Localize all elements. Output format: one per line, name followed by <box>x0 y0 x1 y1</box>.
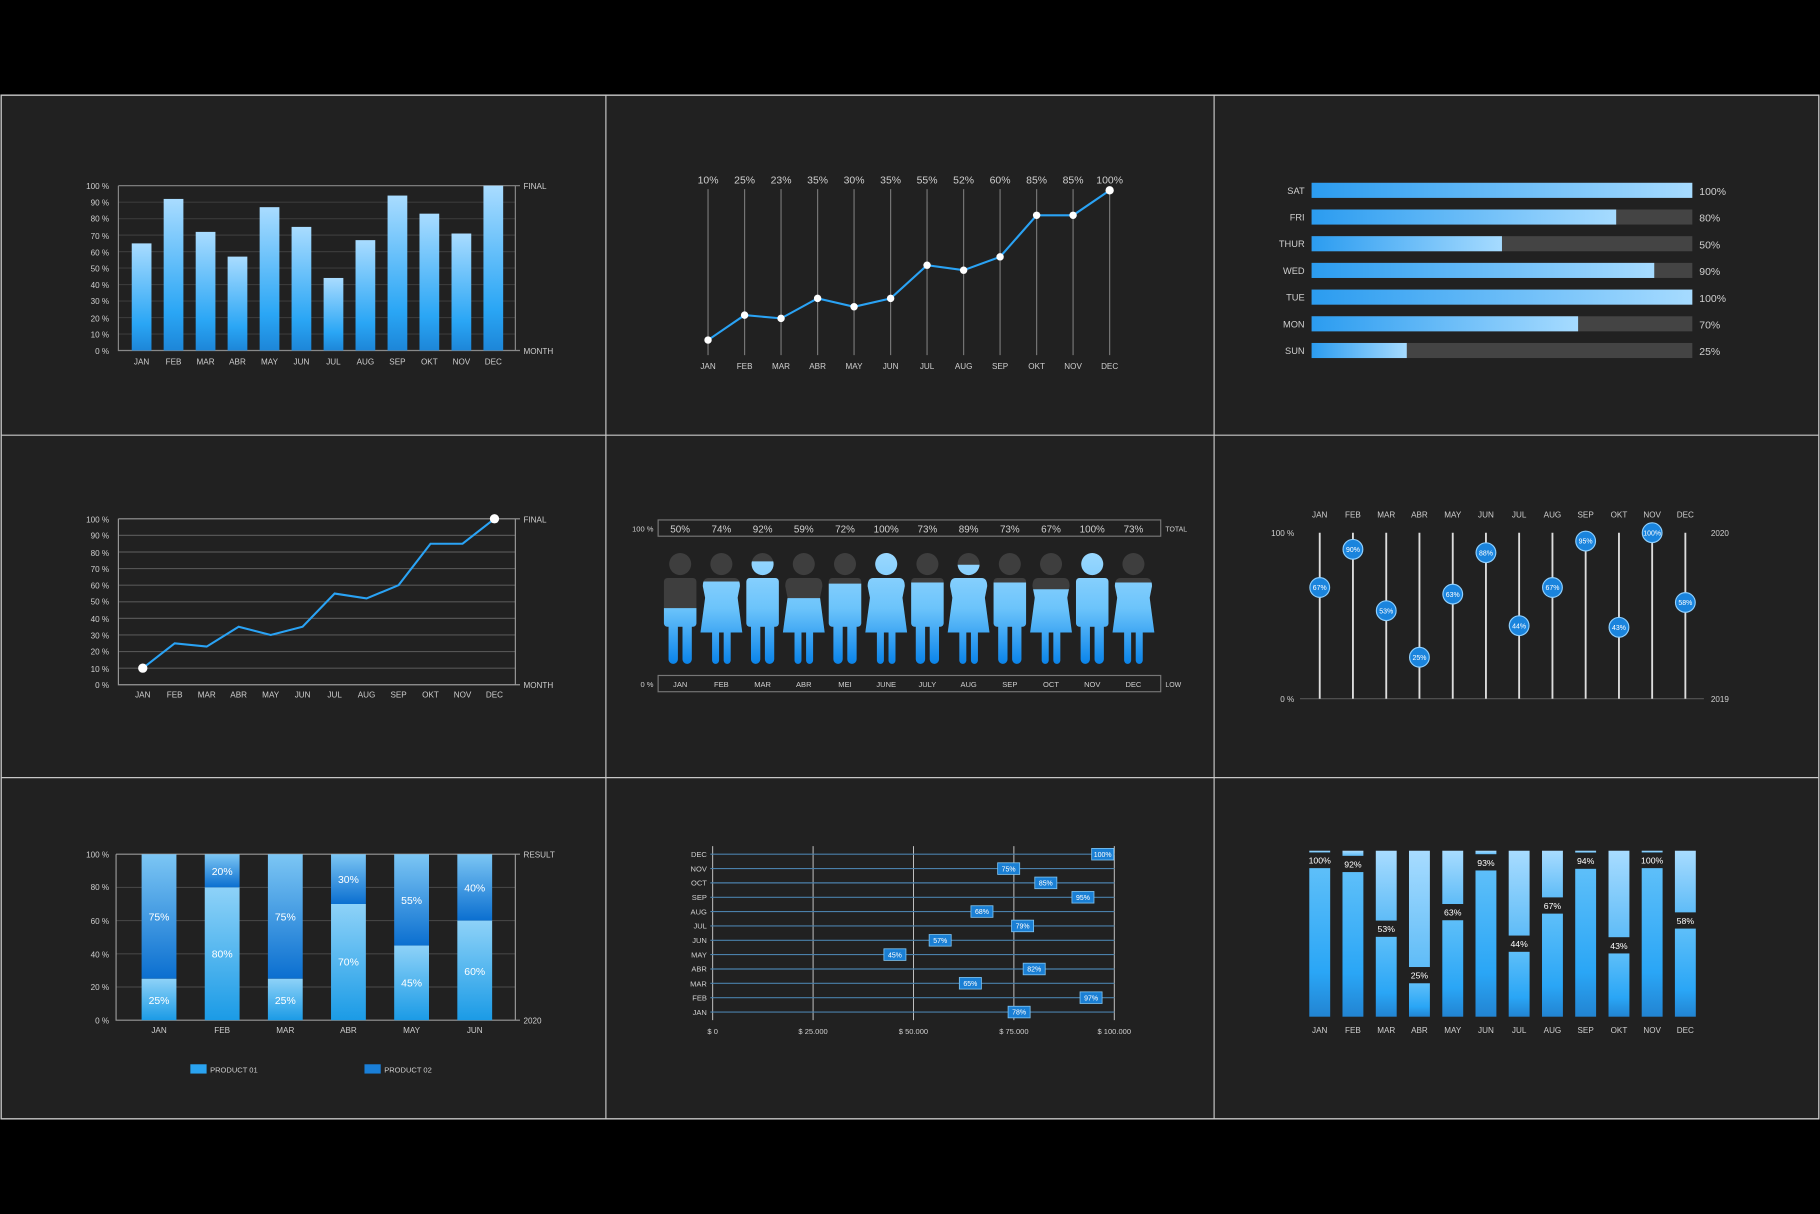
panel: grid line chart: JAN <box>135 691 151 700</box>
panel: grid line chart: AUG <box>358 691 375 700</box>
panel: grid line chart: 80 % <box>91 549 109 558</box>
panel: line chart with vertical guides: JAN <box>700 362 716 371</box>
panel: lollipop sliders: JUN <box>1478 511 1494 520</box>
panel: people pictogram: 0 % <box>640 680 654 689</box>
panel: lollipop sliders: 2019 <box>1711 695 1729 704</box>
panel: people pictogram: OCT <box>1043 680 1059 689</box>
panel: monthly bar chart <box>86 182 553 366</box>
panel: horizontal weekday bars: FRI <box>1290 213 1305 223</box>
panel: revenue dot tags: 57% <box>933 938 947 945</box>
panel: people pictogram: TOTAL <box>1165 527 1187 534</box>
panel: grid line chart: 30 % <box>91 631 109 640</box>
panel: lollipop sliders: MAR <box>1377 511 1395 520</box>
panel: lollipop sliders: FEB <box>1345 511 1361 520</box>
panel: line chart with vertical guides: 52% <box>953 175 974 186</box>
panel: line chart with vertical guides: 25% <box>734 175 755 186</box>
panel: stacked product bars: 25% <box>149 996 169 1007</box>
figures filled <box>664 553 1154 664</box>
panel: grid line chart: 10 % <box>91 665 109 674</box>
panel: column progress bars: DEC <box>1677 1026 1694 1035</box>
panel: monthly bar chart: JAN <box>134 357 149 366</box>
panel: revenue dot tags: 45% <box>888 952 902 959</box>
panel: stacked product bars: JAN <box>151 1026 167 1035</box>
panel: line chart with vertical guides: AUG <box>955 362 972 371</box>
panel: line chart with vertical guides: 100% <box>1096 175 1123 186</box>
panel: line chart with vertical guides: 85% <box>1063 175 1084 186</box>
panel: horizontal weekday bars: WED <box>1283 266 1305 276</box>
panel: lollipop sliders: 44% <box>1512 623 1526 630</box>
panel: line chart with vertical guides: JUL <box>920 362 935 371</box>
panel: grid line chart: SEP <box>390 691 407 700</box>
panel: lollipop sliders: 67% <box>1313 585 1327 592</box>
panel: stacked product bars: 0 % <box>95 1017 109 1026</box>
panel: monthly bar chart: 90 % <box>91 198 109 207</box>
legend: PRODUCT 01 <box>210 1065 258 1074</box>
panel: column progress bars: JAN <box>1312 1026 1328 1035</box>
panel: stacked product bars: 60 % <box>91 917 109 926</box>
panel: line chart with vertical guides: MAR <box>772 362 790 371</box>
panel: column progress bars: 67% <box>1544 901 1561 911</box>
panel: horizontal weekday bars <box>1279 183 1726 358</box>
panel: people pictogram: 74% <box>712 525 731 536</box>
panel: revenue dot tags: $ 100.000 <box>1098 1027 1131 1036</box>
panel: people pictogram: 89% <box>959 525 979 536</box>
panel: lollipop sliders: 100 % <box>1271 529 1294 538</box>
panel: people pictogram: 73% <box>1000 525 1020 536</box>
panel: revenue dot tags: $ 25.000 <box>798 1027 828 1036</box>
panel: revenue dot tags <box>690 846 1131 1036</box>
panel: grid line chart: 40 % <box>91 615 109 624</box>
panel: grid line chart: 60 % <box>91 581 109 590</box>
panel: grid line chart: JUL <box>327 691 342 700</box>
panel: people pictogram: LOW <box>1165 682 1182 689</box>
panel: stacked product bars: 60% <box>464 967 485 978</box>
panel: column progress bars: NOV <box>1643 1026 1662 1035</box>
panel: horizontal weekday bars: 80% <box>1699 214 1720 225</box>
legend <box>190 1064 432 1074</box>
panel: monthly bar chart: 0 % <box>95 347 109 356</box>
panel: line chart with vertical guides: NOV <box>1064 362 1082 371</box>
panel: column progress bars: 94% <box>1577 856 1595 866</box>
panel: column progress bars: OKT <box>1611 1026 1627 1035</box>
panel: grid line chart: 90 % <box>91 532 109 541</box>
panel: line chart with vertical guides: 23% <box>771 175 791 186</box>
panel: lollipop sliders: JUL <box>1512 511 1527 520</box>
panel: line chart with vertical guides: ABR <box>809 362 826 371</box>
panel: column progress bars: 53% <box>1378 924 1395 934</box>
panel: column progress bars: 63% <box>1444 908 1462 918</box>
panel: line chart with vertical guides <box>698 175 1123 371</box>
panel: lollipop sliders: NOV <box>1643 511 1662 520</box>
panel: lollipop sliders: AUG <box>1544 511 1561 520</box>
panel: monthly bar chart: 70 % <box>91 232 109 241</box>
panel: lollipop sliders: 67% <box>1545 585 1559 592</box>
panel: monthly bar chart: JUN <box>294 357 309 366</box>
panel: grid line chart: FEB <box>167 691 183 700</box>
panel: lollipop sliders: OKT <box>1611 511 1627 520</box>
panel: grid line chart: OKT <box>422 691 439 700</box>
panel: lollipop sliders: 0 % <box>1280 695 1294 704</box>
panel: lollipop sliders: 88% <box>1479 550 1493 557</box>
panel: column progress bars: 25% <box>1411 971 1428 981</box>
panel: stacked product bars: MAY <box>403 1026 421 1035</box>
panel: revenue dot tags: DEC <box>691 850 707 859</box>
panel: stacked product bars: 45% <box>401 979 422 990</box>
panel: line chart with vertical guides: MAY <box>846 362 863 371</box>
panel: horizontal weekday bars: 100% <box>1699 187 1726 198</box>
panel: grid line chart <box>86 514 553 700</box>
panel: grid line chart: FINAL <box>523 515 547 524</box>
panel: column progress bars: 44% <box>1510 939 1528 949</box>
panel: grid line chart: NOV <box>454 691 472 700</box>
panel: revenue dot tags: 97% <box>1084 995 1098 1002</box>
panel: revenue dot tags: 75% <box>1002 866 1016 873</box>
panel: line chart with vertical guides: DEC <box>1101 362 1118 371</box>
panel: grid line chart: DEC <box>486 691 503 700</box>
panel: line chart with vertical guides: FEB <box>737 362 752 371</box>
panel: people pictogram: FEB <box>714 680 729 689</box>
panel: revenue dot tags: JUN <box>692 936 707 945</box>
panel: horizontal weekday bars: 50% <box>1699 240 1720 251</box>
panel: grid line chart: ABR <box>230 691 247 700</box>
panel: stacked product bars: JUN <box>467 1026 483 1035</box>
panel: monthly bar chart: 80 % <box>91 215 109 224</box>
panel: monthly bar chart: SEP <box>389 357 406 366</box>
panel: horizontal weekday bars: 100% <box>1699 294 1726 305</box>
panel: people pictogram: 100 % <box>632 525 654 534</box>
panel: people pictogram: JAN <box>673 680 687 689</box>
panel: stacked product bars <box>86 851 555 1074</box>
panel: lollipop sliders: 43% <box>1612 625 1626 632</box>
panel: revenue dot tags: 100% <box>1094 852 1112 859</box>
panel: stacked product bars: FEB <box>214 1026 230 1035</box>
panel: lollipop sliders <box>1271 511 1729 704</box>
panel: column progress bars: 92% <box>1344 859 1362 869</box>
panel: lollipop sliders: ABR <box>1411 511 1428 520</box>
panel: stacked product bars: RESULT <box>523 851 555 860</box>
panel: grid line chart: 20 % <box>91 648 109 657</box>
panel: stacked product bars: 75% <box>275 912 296 923</box>
panel: column progress bars: 93% <box>1477 858 1495 868</box>
panel: column progress bars: SEP <box>1578 1026 1594 1035</box>
panel: column progress bars: JUL <box>1512 1026 1527 1035</box>
panel: people pictogram: JUNE <box>876 680 896 689</box>
panel: people pictogram: JULY <box>918 680 936 689</box>
panel: revenue dot tags: JUL <box>693 921 707 930</box>
panel: stacked product bars: 40% <box>464 883 485 894</box>
panel: revenue dot tags: MAR <box>690 980 707 989</box>
panel: horizontal weekday bars: 25% <box>1699 347 1720 358</box>
panel: line chart with vertical guides: 10% <box>698 175 718 186</box>
panel: people pictogram: SEP <box>1002 680 1017 689</box>
panel: grid line chart: MAY <box>262 691 280 700</box>
panel: monthly bar chart: NOV <box>453 357 471 366</box>
figures gray <box>664 553 1154 664</box>
panel: column progress bars: 100% <box>1309 855 1331 865</box>
panel: stacked product bars: MAR <box>276 1026 294 1035</box>
panel: revenue dot tags: 95% <box>1076 895 1090 902</box>
panel: column progress bars: MAY <box>1444 1026 1462 1035</box>
panel: monthly bar chart: MONTH <box>523 347 553 356</box>
panel: monthly bar chart: OKT <box>421 357 438 366</box>
panel: stacked product bars: 55% <box>401 896 422 907</box>
panel: revenue dot tags: 78% <box>1012 1010 1026 1017</box>
panel: revenue dot tags: $ 0 <box>707 1027 718 1036</box>
panel: column progress bars: JUN <box>1478 1026 1494 1035</box>
panel: revenue dot tags: FEB <box>692 993 707 1002</box>
panel: people pictogram: NOV <box>1084 680 1100 689</box>
panel: stacked product bars: 40 % <box>91 951 109 960</box>
panel: stacked product bars: 20% <box>212 867 233 878</box>
panel: stacked product bars: 100 % <box>86 851 109 860</box>
panel: revenue dot tags: AUG <box>691 908 707 917</box>
panel: line chart with vertical guides: 35% <box>880 175 901 186</box>
panel: horizontal weekday bars: MON <box>1283 319 1305 329</box>
panel: monthly bar chart: 60 % <box>91 248 109 257</box>
panel: revenue dot tags: SEP <box>692 893 707 902</box>
panel: column progress bars: MAR <box>1377 1026 1395 1035</box>
panel: column progress bars: 58% <box>1677 916 1694 926</box>
panel: revenue dot tags: 82% <box>1027 967 1041 974</box>
panel: revenue dot tags: OCT <box>691 879 707 888</box>
panel: revenue dot tags: JAN <box>693 1008 707 1017</box>
panel: revenue dot tags: 85% <box>1039 881 1053 888</box>
panel: lollipop sliders: MAY <box>1444 511 1462 520</box>
panel: column progress bars: FEB <box>1345 1026 1361 1035</box>
panel: lollipop sliders: 95% <box>1579 539 1593 546</box>
panel: monthly bar chart: MAY <box>261 357 279 366</box>
panel: lollipop sliders: 53% <box>1379 608 1393 615</box>
panel: horizontal weekday bars: SAT <box>1287 186 1305 196</box>
panel: line chart with vertical guides: OKT <box>1028 362 1045 371</box>
panel: column progress bars: 43% <box>1610 941 1628 951</box>
panel: horizontal weekday bars: SUN <box>1285 346 1305 356</box>
panel: revenue dot tags: NOV <box>691 865 707 874</box>
panel: lollipop sliders: 2020 <box>1711 529 1729 538</box>
panel: revenue dot tags: 65% <box>963 981 977 988</box>
panel: line chart with vertical guides: JUN <box>883 362 899 371</box>
panel: people pictogram: 72% <box>835 525 855 536</box>
panel: line chart with vertical guides: SEP <box>992 362 1008 371</box>
panel: stacked product bars: 25% <box>275 996 296 1007</box>
panel: monthly bar chart: 30 % <box>91 297 109 306</box>
panel: horizontal weekday bars: 70% <box>1699 320 1720 331</box>
panel: line chart with vertical guides: 30% <box>844 175 864 186</box>
panel: stacked product bars: 80% <box>212 950 233 961</box>
panel: grid line chart: JUN <box>295 691 311 700</box>
panel: grid line chart: 50 % <box>91 598 109 607</box>
panel: column progress bars: 100% <box>1641 855 1664 865</box>
panel: stacked product bars: 30% <box>338 875 359 886</box>
panel: people pictogram <box>632 520 1187 692</box>
panel: people pictogram: 67% <box>1041 525 1061 536</box>
panel: people pictogram: ABR <box>796 680 812 689</box>
panel: monthly bar chart: ABR <box>229 357 246 366</box>
bars <box>132 186 503 351</box>
panel: monthly bar chart: DEC <box>485 357 502 366</box>
panel: stacked product bars: 80 % <box>91 883 109 892</box>
panel: horizontal weekday bars: THUR <box>1279 239 1305 249</box>
panel: monthly bar chart: MAR <box>197 357 215 366</box>
panel: people pictogram: 92% <box>753 525 773 536</box>
panel: monthly bar chart: AUG <box>357 357 374 366</box>
panel: monthly bar chart: JUL <box>326 357 341 366</box>
panel: lollipop sliders: SEP <box>1578 511 1594 520</box>
panel: people pictogram: 100% <box>874 525 899 536</box>
panel: grid line chart: MAR <box>198 691 216 700</box>
panel: lollipop sliders: 25% <box>1412 655 1426 662</box>
panel: grid line chart: 100 % <box>86 515 109 524</box>
panel: people pictogram: MAR <box>754 680 772 689</box>
panel: monthly bar chart: 100 % <box>86 182 109 191</box>
panel: line chart with vertical guides: 55% <box>917 175 938 186</box>
panel: monthly bar chart: 10 % <box>91 331 109 340</box>
panel: grid line chart: 0 % <box>95 681 109 690</box>
panel: revenue dot tags: MAY <box>691 951 707 960</box>
panel: people pictogram: 100% <box>1080 525 1105 536</box>
panel: lollipop sliders: DEC <box>1677 511 1694 520</box>
panel: revenue dot tags: 79% <box>1016 924 1030 931</box>
panel: grid line chart: MONTH <box>523 681 553 690</box>
panel: line chart with vertical guides: 85% <box>1026 175 1047 186</box>
panel: revenue dot tags: 68% <box>975 909 989 916</box>
panel: line chart with vertical guides: 35% <box>807 175 828 186</box>
panel: stacked product bars: ABR <box>340 1026 357 1035</box>
panel: monthly bar chart: 50 % <box>91 265 109 274</box>
panel: stacked product bars: 75% <box>149 912 169 923</box>
panel: horizontal weekday bars: TUE <box>1286 293 1305 303</box>
panel: people pictogram: 50% <box>670 525 690 536</box>
panel: people pictogram: 73% <box>1124 525 1144 536</box>
panel: grid line chart: 70 % <box>91 565 109 574</box>
panel: horizontal weekday bars: 90% <box>1699 267 1720 278</box>
panel: lollipop sliders: 58% <box>1678 600 1692 607</box>
panel: monthly bar chart: 40 % <box>91 281 109 290</box>
panel: lollipop sliders: 100% <box>1643 530 1661 537</box>
panel: revenue dot tags: ABR <box>691 964 707 973</box>
panel: line chart with vertical guides: 60% <box>990 175 1011 186</box>
panel: column progress bars <box>1309 851 1696 1035</box>
panel: revenue dot tags: $ 75.000 <box>999 1027 1029 1036</box>
panel: revenue dot tags: $ 50.000 <box>899 1027 928 1036</box>
panel: monthly bar chart: FEB <box>166 357 181 366</box>
panel: lollipop sliders: JAN <box>1312 511 1328 520</box>
panel: column progress bars: ABR <box>1411 1026 1428 1035</box>
panel: people pictogram: MEI <box>838 680 852 689</box>
legend: PRODUCT 02 <box>384 1065 432 1074</box>
panel: stacked product bars: 20 % <box>91 983 109 992</box>
panel: people pictogram: AUG <box>960 680 977 689</box>
panel: lollipop sliders: 63% <box>1446 592 1460 599</box>
panel: people pictogram: 59% <box>794 525 814 536</box>
panel: column progress bars: AUG <box>1544 1026 1561 1035</box>
panel: people pictogram: DEC <box>1125 680 1142 689</box>
panel: monthly bar chart: 20 % <box>91 314 109 323</box>
panel: people pictogram: 73% <box>918 525 938 536</box>
panel: monthly bar chart: FINAL <box>523 182 547 191</box>
panel: lollipop sliders: 90% <box>1346 547 1360 554</box>
panel: stacked product bars: 2020 <box>523 1017 542 1026</box>
panel: stacked product bars: 70% <box>338 958 359 969</box>
